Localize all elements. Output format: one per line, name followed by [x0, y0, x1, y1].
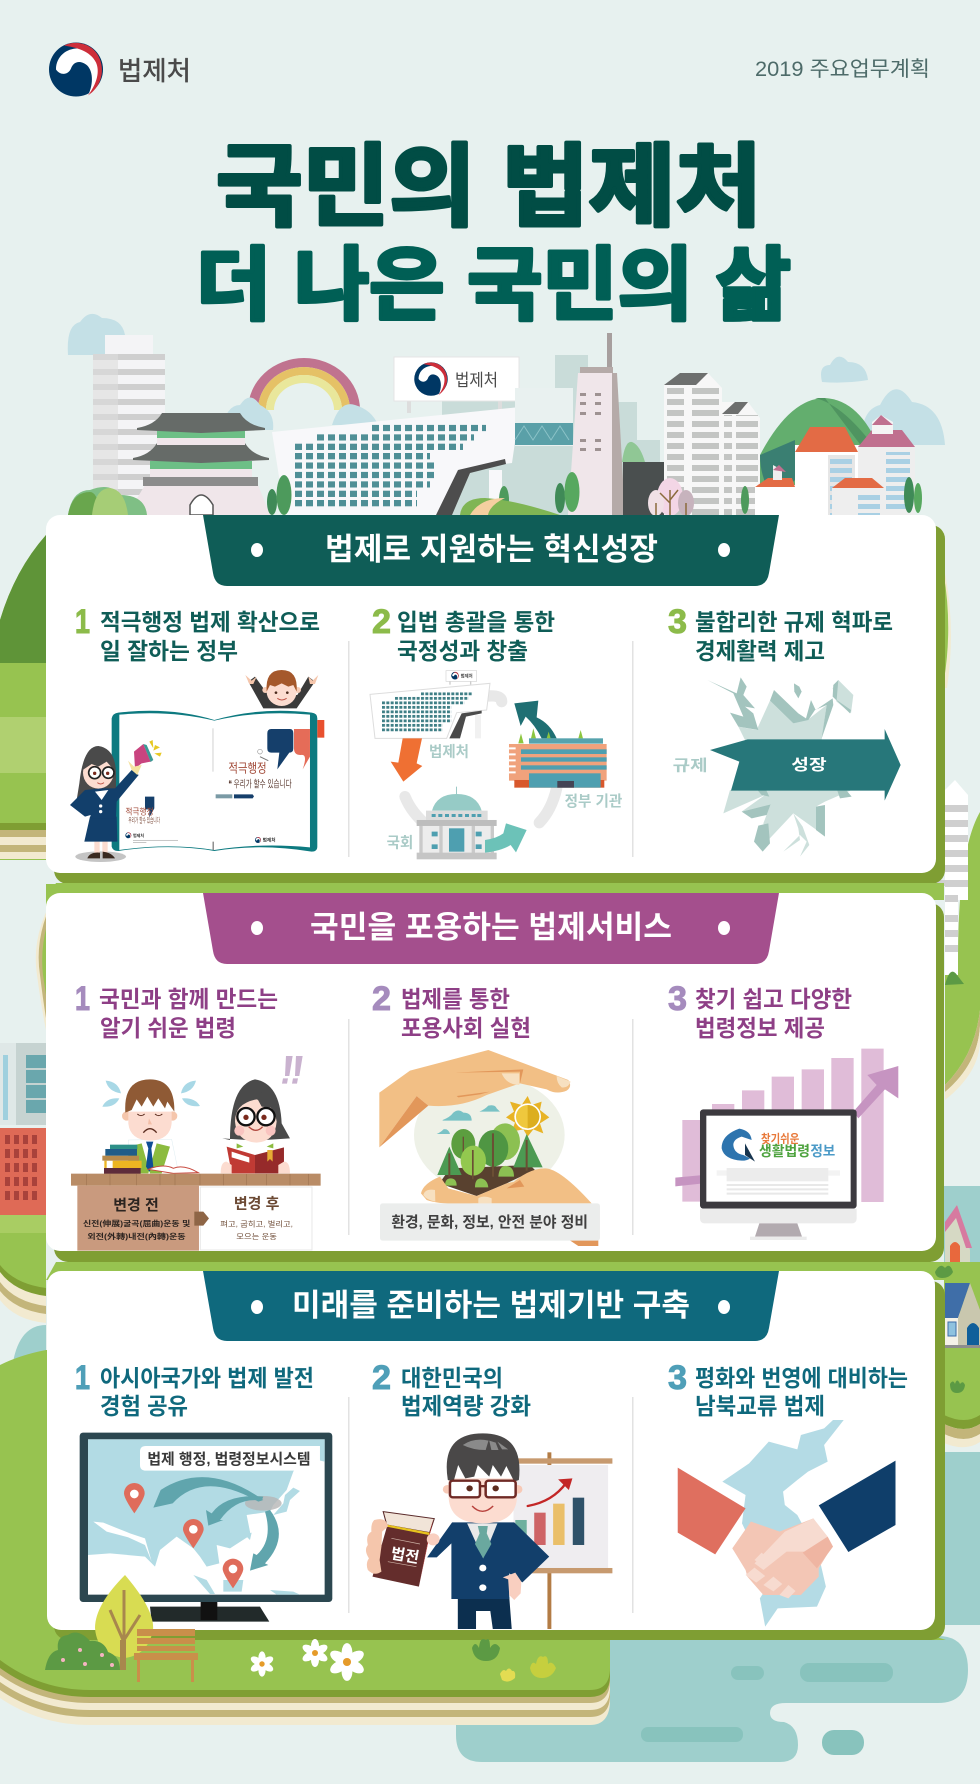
item 3-2 heading: 2 [372, 1359, 391, 1397]
gate [127, 485, 270, 515]
item 3-1 heading [75, 1359, 314, 1419]
item 1-1 heading: 일 잘하는 정부 [100, 638, 238, 664]
header logo [49, 42, 191, 96]
tv stand [150, 1607, 269, 1622]
illustration: arrow breaking through regulation wall [673, 677, 901, 857]
item 2-3 heading: 법령정보 제공 [695, 1015, 825, 1041]
title: 국민의 법제처 [216, 138, 762, 238]
item 1-3 heading: 경제활력 제고 [695, 638, 825, 664]
illustration: open book with characters: 법제처 [133, 832, 144, 838]
arcs [153, 1477, 263, 1508]
law book: 법전 [389, 1545, 421, 1567]
government building [509, 728, 607, 788]
sleeves [678, 1468, 746, 1554]
arrow label: 성장 [791, 757, 827, 774]
illustration: man with law book and chart [366, 1433, 612, 1629]
panel: card 3 [46, 1262, 945, 1640]
tv label: 법제 행정, 법령정보시스템 [147, 1451, 311, 1468]
trees [437, 1123, 543, 1187]
right building [860, 780, 980, 1100]
caption box: 환경, 문화, 정보, 안전 분야 정비 [391, 1214, 588, 1231]
item 3-1 heading: 경험 공유 [100, 1393, 188, 1419]
monitor [700, 1109, 857, 1240]
water at bottom right [13, 1186, 980, 1762]
skyline [68, 314, 945, 516]
item 2-1 heading: 알기 쉬운 법령 [100, 1015, 236, 1041]
pale circle [414, 1077, 565, 1193]
label: 법제처: 법제처 [429, 744, 469, 761]
illustration: open book with characters: 법제처 [263, 837, 276, 844]
arrow between panels [194, 1212, 209, 1226]
exclamation marks [282, 1056, 303, 1084]
item 1-2 heading [372, 603, 555, 664]
item 1-2 heading: 국정성과 창출 [397, 638, 528, 664]
right upper land [930, 520, 951, 688]
hands [732, 1518, 832, 1595]
bush [45, 1633, 120, 1670]
header logo: 법제처 [118, 56, 191, 86]
towers [664, 373, 722, 515]
plan label: 2019 주요업무계획 [755, 58, 930, 81]
peninsula [722, 1420, 844, 1627]
law book [366, 1512, 440, 1587]
after panel [200, 1187, 312, 1250]
item 2-2 heading: 포용사회 실현 [401, 1015, 531, 1041]
card 3 shadow [54, 1281, 945, 1640]
site logo: 생활법령 [759, 1143, 810, 1159]
item 3-2 heading: 법제역량 강화 [401, 1393, 531, 1419]
banner 1: 법제로 지원하는 혁신성장 [325, 532, 658, 567]
before panel: 외전(外轉)내전(內轉)운동 [87, 1232, 186, 1241]
item 2-1 heading: 1 [75, 980, 90, 1018]
illustration: hands protecting trees [379, 1050, 600, 1246]
banner 3: 미래를 준비하는 법제기반 구축 [292, 1288, 690, 1323]
illustration: open book with characters: 우리가 할수 있습니다 [128, 815, 160, 824]
book [112, 711, 317, 852]
girl [70, 740, 162, 862]
item 2-2 heading: 법제를 통한 [401, 986, 510, 1012]
after panel: 변경 후 [234, 1195, 280, 1212]
boy [245, 670, 318, 708]
main building [272, 407, 520, 515]
flowers [249, 1639, 366, 1681]
banner 2 [203, 893, 779, 964]
item 3-2 heading [372, 1359, 531, 1419]
hill [760, 398, 880, 515]
clouds [437, 1105, 500, 1134]
tv frame [80, 1433, 332, 1602]
title: 더 나은 국민의 삶 [196, 241, 791, 330]
left upper land [0, 535, 46, 860]
label: 국회: 국회 [387, 835, 413, 852]
item 3-3 heading: 평화와 번영에 대비하는 [695, 1365, 908, 1391]
building mini [370, 671, 490, 738]
card 2 shadow [54, 903, 944, 1262]
item 3-3 heading [668, 1359, 908, 1419]
item 1-3 heading: 불합리한 규제 혁파로 [695, 609, 893, 635]
site logo [722, 1129, 835, 1162]
dark teal arrow [514, 701, 557, 738]
cracked wall [707, 677, 853, 857]
site logo: 정보 [810, 1143, 835, 1159]
gray spot [245, 1496, 282, 1511]
white sea notch [93, 1522, 152, 1562]
illustration: monitor with rising bars [675, 1049, 898, 1240]
growth arrow [675, 1066, 898, 1186]
sign [407, 401, 411, 413]
sweat drops [102, 1081, 200, 1107]
map land [88, 1439, 325, 1595]
banner 3 [203, 1271, 779, 1341]
bars [682, 1049, 884, 1202]
illustration: handshake over korean peninsula [678, 1420, 896, 1627]
item 1-1 heading: 적극행정 법제 확산으로 [100, 609, 320, 635]
item 1-2 heading: 입법 총괄을 통한 [397, 609, 555, 635]
bench [134, 1629, 198, 1682]
illustration: open book with characters [70, 670, 324, 862]
after panel: 펴고, 굽히고, 벌리고, [220, 1219, 293, 1229]
houses [795, 445, 858, 515]
sun [506, 1096, 549, 1137]
illustration: before and after desk [71, 1056, 321, 1251]
item 2-1 heading: 국민과 함께 만드는 [99, 986, 278, 1012]
blue roof house right [945, 1283, 980, 1348]
background pale buildings [442, 355, 660, 515]
item 3-1 heading: 아시아국가와 법제 발전 [100, 1365, 314, 1391]
illustration: open book with characters: 적극행정 [228, 760, 267, 775]
item 3-2 heading: 대한민국의 [401, 1365, 503, 1391]
item 2-3 heading: 찾기 쉽고 다양한 [695, 986, 852, 1012]
item 1-3 heading [668, 603, 893, 664]
card 1 shadow [54, 525, 945, 884]
item 2-3 heading: 3 [668, 980, 687, 1018]
soil [439, 1165, 535, 1196]
boy at desk [122, 1079, 198, 1173]
cycle gray arcs [405, 696, 557, 827]
item 2-1 heading [75, 980, 278, 1041]
bushes [68, 487, 147, 515]
banner 2: 국민을 포용하는 법제서비스 [310, 910, 672, 945]
easel and chart [514, 1452, 612, 1629]
grass tufts [472, 1266, 953, 1682]
trees [267, 472, 922, 515]
dark building [622, 442, 645, 462]
item 2-2 heading [372, 980, 531, 1041]
speech bubbles [145, 729, 310, 817]
building mini: 법제처 [461, 672, 473, 679]
item 2-3 heading [668, 980, 852, 1041]
skyline: 법제처 [455, 371, 498, 390]
banner 1 [203, 515, 779, 586]
top hand [379, 1050, 570, 1147]
bottom hands [421, 1168, 592, 1204]
after panel: 모으는 운동 [236, 1232, 277, 1241]
before panel: 변경 전 [113, 1197, 159, 1214]
item 3-1 heading: 1 [75, 1359, 90, 1397]
cherry trees [657, 478, 683, 516]
illustration: open book with characters: 적극행정 [125, 805, 154, 816]
site logo: 찾기쉬운 [761, 1131, 799, 1146]
pink house right [945, 1205, 972, 1262]
left buildings [0, 1043, 46, 1215]
regulation label: 규제 [673, 758, 708, 775]
before panel: 신전(伸展)굴곡(屈曲)운동 및 [83, 1219, 191, 1228]
pink tower [607, 333, 612, 368]
illustration: cycle between 법제처, 국회, 정부 기관 [370, 671, 623, 859]
girl at desk [221, 1079, 290, 1173]
panel: card 2 [46, 883, 944, 1262]
item 3-3 heading: 남북교류 법제 [695, 1393, 825, 1419]
right land under second card [944, 1262, 980, 1447]
item 3-3 heading: 3 [668, 1359, 687, 1397]
teal arrow [485, 823, 527, 853]
legs [458, 1597, 512, 1629]
before panel [77, 1186, 199, 1251]
megaphone [134, 744, 151, 768]
rainbow [248, 358, 360, 410]
lower land [0, 1350, 946, 1725]
park tree [95, 1575, 153, 1670]
item 1-1 heading [75, 603, 320, 664]
illustration: tv with asia map [80, 1433, 332, 1622]
caption box [380, 1203, 600, 1241]
left land under second card [0, 1215, 46, 1323]
item 1-1 heading: 1 [75, 603, 90, 641]
arm hand [503, 1573, 521, 1600]
label: 정부 기관: 정부 기관 [565, 793, 623, 810]
head [443, 1433, 522, 1523]
bridge [515, 388, 573, 446]
pins [124, 1483, 243, 1588]
white tower [93, 335, 165, 515]
tv label [140, 1446, 320, 1471]
clouds [68, 314, 945, 445]
left middle land [36, 884, 64, 1030]
title [196, 138, 791, 330]
books stack [102, 1145, 142, 1174]
panel: card 1 [46, 515, 945, 884]
item 1-3 heading: 3 [668, 603, 687, 641]
illustration: open book with characters: ❝ 우리가 할수 있습니다 [228, 778, 292, 790]
desk top [71, 1174, 321, 1186]
item 1-2 heading: 2 [372, 603, 391, 641]
assembly [417, 787, 497, 859]
orange arrow [391, 738, 422, 782]
growth arrow [710, 729, 901, 801]
item 2-2 heading: 2 [372, 980, 391, 1018]
suit [427, 1522, 549, 1599]
